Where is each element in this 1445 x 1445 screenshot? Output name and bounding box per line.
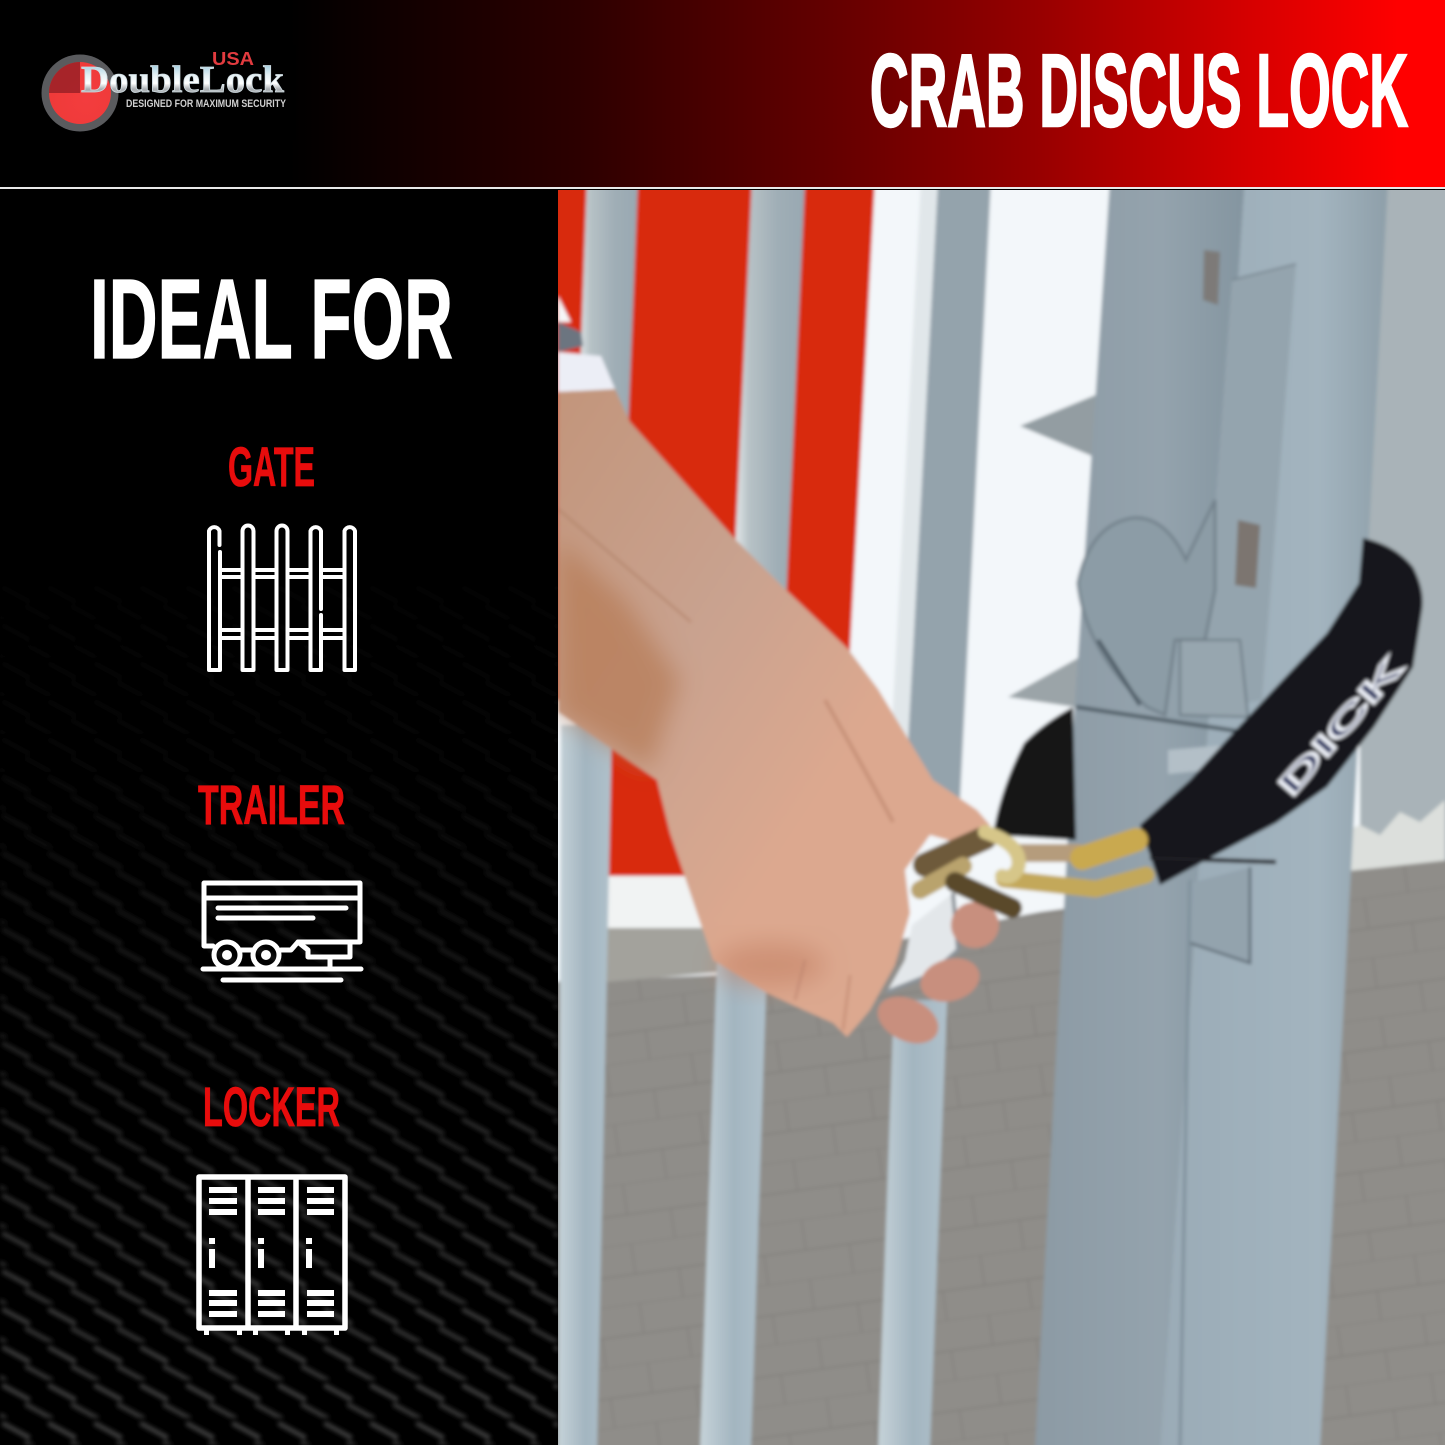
spikes	[1020, 394, 1098, 456]
fence bar 3 lower	[878, 1000, 947, 1445]
wall base weathering	[1350, 800, 1445, 872]
panel: ideal for	[0, 189, 558, 1445]
fence bar 2	[735, 180, 805, 600]
logo wordmark: DoubleLock	[81, 59, 285, 101]
chain sleeve logo: DICK	[1272, 651, 1411, 803]
label: gate: GATE	[228, 435, 315, 498]
fence bar 3	[905, 180, 991, 800]
lower fingers	[870, 902, 999, 1053]
heading: ideal for: IDEAL FOR	[90, 256, 453, 382]
arm	[558, 389, 990, 1037]
logo USA: USA	[212, 49, 254, 69]
pavement	[550, 860, 1445, 1445]
gravel strip	[606, 928, 722, 982]
door frame: white	[606, 876, 712, 928]
header band	[0, 0, 1445, 189]
discus padlock	[887, 893, 958, 992]
chain sleeve	[993, 538, 1423, 885]
gate post	[1035, 180, 1388, 1445]
icon: trailer	[203, 883, 361, 980]
icon: locker	[199, 1177, 345, 1335]
fence bar 1 lower	[558, 725, 612, 1445]
photo: hands locking a gate with chain and discus padlock	[550, 180, 1445, 1445]
label: locker: LOCKER	[203, 1075, 340, 1138]
icon: gate	[209, 526, 355, 670]
door panel: red	[550, 180, 875, 876]
logo tagline: DESIGNED FOR MAXIMUM SECURITY	[126, 98, 287, 110]
wall background	[558, 190, 1364, 985]
logo disc	[42, 54, 118, 132]
grey wall at right	[1360, 180, 1445, 880]
gold chain links	[920, 832, 1146, 908]
label: trailer: TRAILER	[198, 773, 345, 836]
fence bar 2 lower	[700, 960, 767, 1445]
sleeve	[558, 296, 615, 392]
fence bar 1	[578, 180, 638, 430]
logo: DoubleLock USA	[30, 45, 296, 140]
hinge plate	[1076, 250, 1260, 774]
